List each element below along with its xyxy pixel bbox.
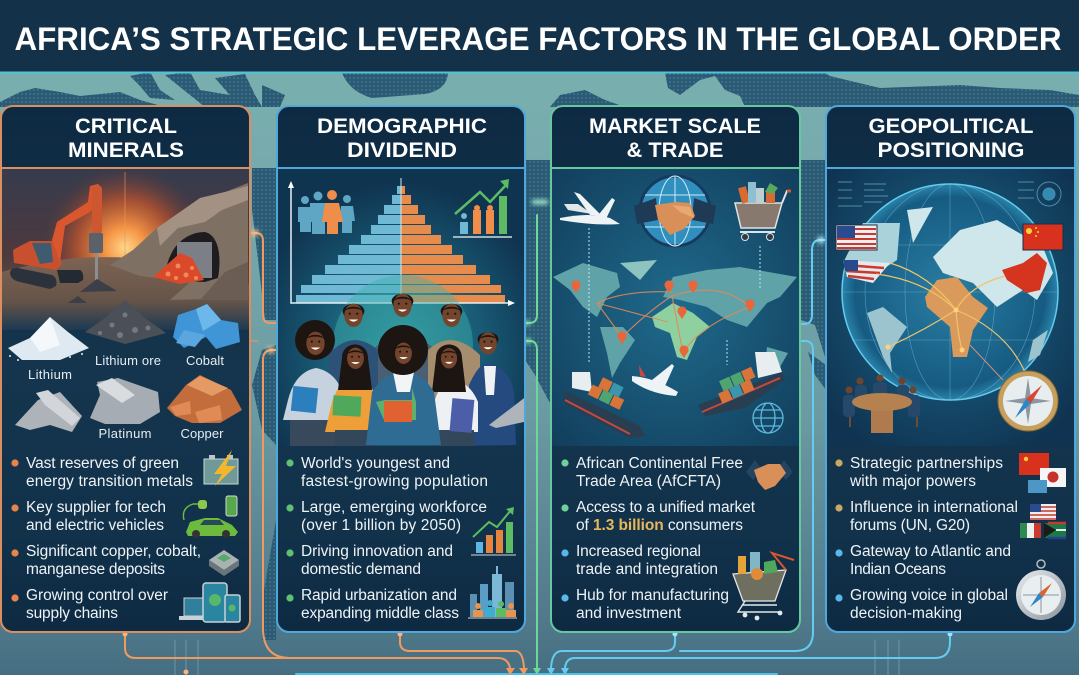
panel: demographic dividend [277,106,536,632]
bullet list: demographic dividend: expanding middle class [301,605,459,622]
bullet list: geopolitical: with major powers [849,473,976,490]
label: copper: Copper [180,426,224,441]
heading: critical minerals: CRITICAL [75,115,177,138]
bullet list: market scale: Increased regional [576,543,701,560]
bullet list: critical minerals: Significant copper, cobalt, [26,543,201,560]
heading: critical minerals: MINERALS [68,139,184,162]
label: platinum: Platinum [98,426,152,441]
mineral: copper [167,375,242,423]
illustration: mining scene [1,166,250,330]
icon: cargo ship left [563,372,645,438]
mineral: lithium [8,317,89,361]
bullet list: critical minerals: energy transition metals [26,473,193,490]
illustration background [826,168,1075,446]
bullet list: market scale: and investment [576,605,682,622]
HUD decoration [838,182,1061,206]
connector lines [122,200,952,675]
label: lithium ore: Lithium ore [95,353,161,368]
heading: demographic dividend [317,115,487,162]
Africa [925,277,988,357]
influence arcs [876,263,1024,370]
bullet list: market scale: Hub for manufacturing [576,587,729,604]
globe [842,184,1058,400]
icon: partner flags [1019,453,1066,493]
icon: small globe [753,403,783,433]
panel: market scale and trade [551,106,800,632]
bullet list: geopolitical: forums (UN, G20) [850,517,970,534]
icon: shopping cart top right [735,182,791,240]
illustration background [551,168,800,446]
bullet list: critical minerals: manganese deposits [26,561,165,578]
mineral: platinum [90,378,160,424]
icon: growth chart [453,179,512,237]
icon: electric car [183,496,238,538]
bullet list: critical minerals: Growing control over [26,587,168,604]
icon: grocery cart [733,552,794,620]
icon: workforce growth chart [471,507,516,555]
flag: China [1023,224,1063,250]
bullet list: geopolitical: Strategic partnerships [850,455,1003,472]
illustration: group of young professionals [283,275,536,446]
icon: compass [998,371,1058,431]
bullet list: critical minerals: Vast reserves of green [26,455,179,472]
bullet list: geopolitical: decision-making [850,605,962,622]
bullet list: geopolitical: Indian Oceans [850,561,946,578]
illustration background [277,168,525,446]
panel: geopolitical positioning [826,106,1075,632]
bullet list: critical minerals [11,455,201,622]
icon: city and people [468,566,517,618]
bullet list: geopolitical: Growing voice in global [850,587,1008,604]
bullet list: demographic dividend: (over 1 billion by 2050) [301,517,461,534]
heading: demographic dividend: DEMOGRAPHIC [317,115,487,138]
label: lithium: Lithium [28,367,72,382]
icon: people group [298,190,355,234]
bullet list: geopolitical: Gateway to Atlantic and [850,543,1011,560]
China [1002,253,1047,293]
title banner [0,0,1079,74]
bullet list: demographic dividend: domestic demand [301,561,421,578]
world trade map [553,228,797,378]
panel border [1,106,250,632]
flag: USA [836,225,877,250]
bullet list: demographic dividend [286,455,488,622]
bullet list: demographic dividend: Large, emerging workforce [301,499,487,516]
icon: devices [179,583,240,622]
mineral: rough rock [15,390,82,432]
bullet list: demographic dividend: Driving innovation and [301,543,453,560]
bullet list: critical minerals: and electric vehicles [26,517,164,534]
heading: demographic dividend: DIVIDEND [347,139,457,162]
bullet list: market scale: Access to a unified market [576,499,756,516]
bullet list: critical minerals: supply chains [26,605,118,622]
bullet list: market scale: African Continental Free [576,455,743,472]
heading: market scale and trade: & TRADE [626,139,724,162]
bullet list: market scale: trade and integration [576,561,718,578]
bullet list: market scale [561,455,756,622]
heading: market scale and trade: MARKET SCALE [589,115,761,138]
panel border [826,106,1075,632]
bullet list: geopolitical: Influence in international [850,499,1018,516]
bullet list: demographic dividend: World's youngest and [301,455,450,472]
icon: plane bottom [632,364,678,396]
heading: geopolitical positioning [868,115,1034,162]
mineral: lithium ore [85,300,166,344]
icon: silver compass [1016,560,1066,620]
icon: battery [204,450,238,486]
panel border [551,106,800,632]
USA striped [843,260,890,283]
bullet list: market scale: of 1.3 billion consumers [576,517,743,534]
bullet list: market scale: Trade Area (AfCFTA) [576,473,721,490]
bullet list: demographic dividend: Rapid urbanization and [301,587,457,604]
icon: cargo ship right [698,352,785,416]
landmasses [843,207,1053,373]
icon: chip stack [209,550,239,576]
chart: population pyramid [288,178,515,306]
icon: handshake [746,460,793,490]
icon: plane top left [560,192,620,224]
heading: market scale and trade [589,115,761,162]
icon: globe handshake [634,176,716,246]
bullet list: critical minerals: Key supplier for tech [26,499,166,516]
bullet list: demographic dividend: fastest-growing population [301,473,488,490]
bullet list: geopolitical [835,455,1018,622]
panel: critical minerals [1,106,250,632]
heading: geopolitical positioning: POSITIONING [878,139,1024,162]
heading: geopolitical positioning: GEOPOLITICAL [868,115,1034,138]
icon: negotiation table [843,374,920,433]
mineral: cobalt [173,304,240,349]
heading: critical minerals [68,115,184,162]
label: cobalt: Cobalt [186,353,224,368]
title: AFRICA’S STRATEGIC LEVERAGE FACTORS IN THE GLOBAL ORDER [14,21,1062,57]
icon: forum flags [1020,504,1066,538]
panel border [277,106,525,632]
